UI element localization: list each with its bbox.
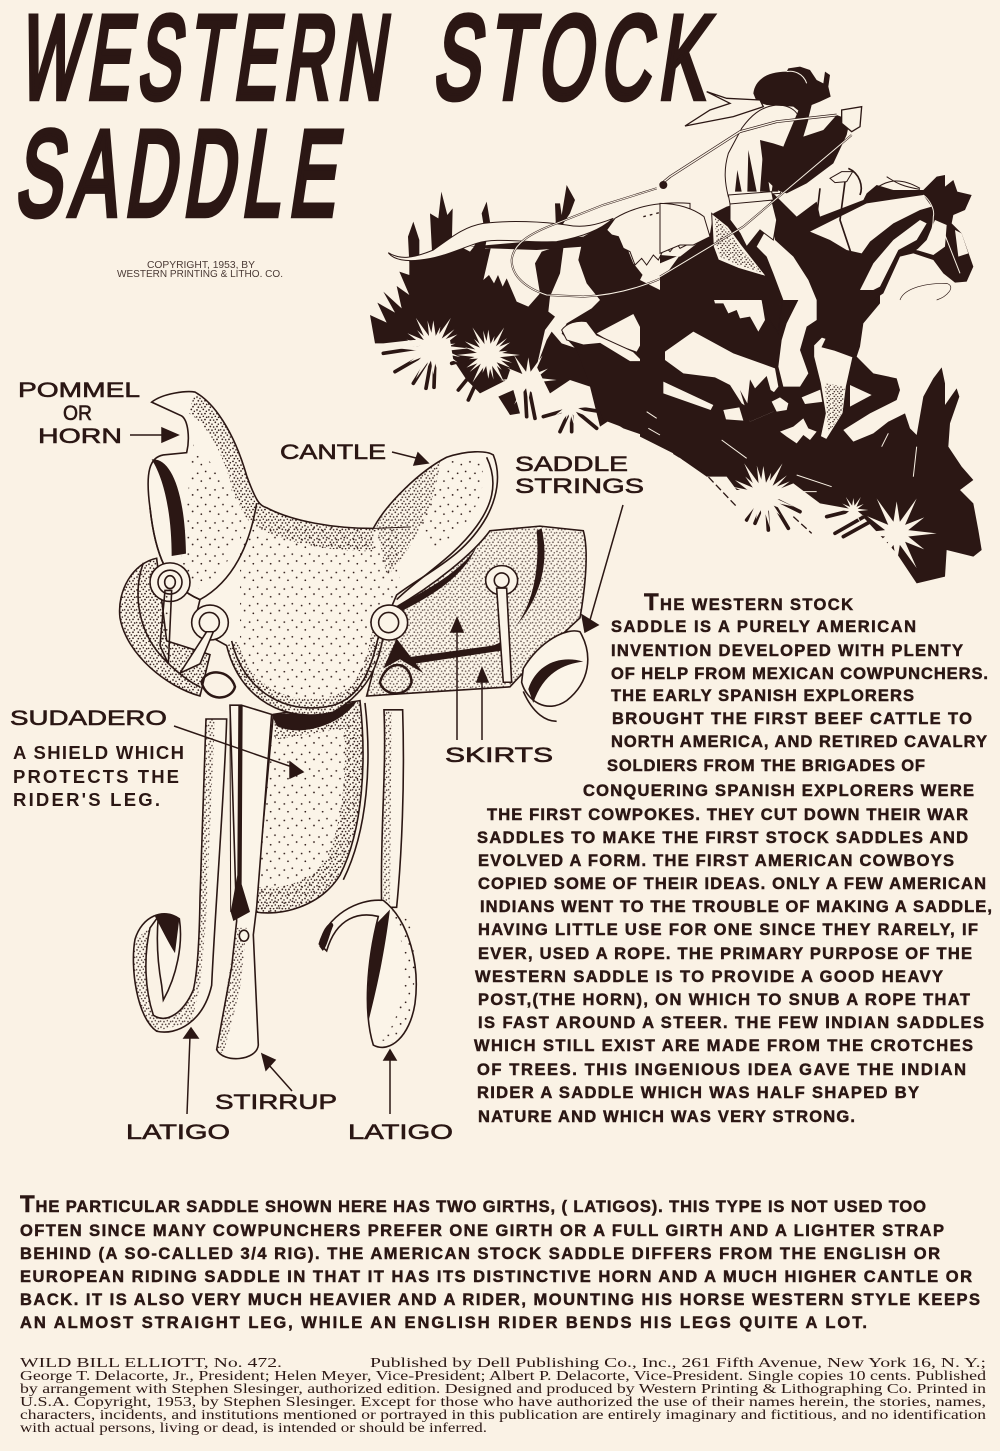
rear rosette and saddle strings bbox=[486, 566, 588, 721]
gap below rear leg bbox=[663, 382, 713, 410]
text block: history of the saddle: SADDLE IS A PURELY AMERICAN bbox=[611, 618, 916, 636]
reins bbox=[817, 168, 861, 260]
ground scratches bbox=[647, 412, 660, 435]
text block: history of the saddle: BROUGHT THE FIRST BEEF CATTLE TO bbox=[612, 710, 972, 728]
title bbox=[10, 0, 728, 241]
text block: history of the saddle: THE WESTERN STOCK bbox=[644, 589, 853, 616]
text block: this particular saddle: OFTEN SINCE MANY COWPUNCHERS PREFER ONE GIRTH OR A FULL GIRTH AND A LIGHTER STRAP bbox=[20, 1222, 944, 1240]
rope in hand bbox=[660, 115, 951, 300]
rider fist bbox=[842, 107, 862, 132]
arrow: to saddle strings bbox=[582, 505, 623, 632]
hindquarter dapples bbox=[643, 210, 688, 225]
text block: history of the saddle: INDIANS WENT TO THE TROUBLE OF MAKING A SADDLE, bbox=[480, 898, 992, 916]
grass tuft white bbox=[780, 418, 817, 443]
copyright note: COPYRIGHT, 1953, BY bbox=[147, 260, 255, 271]
left rosette and strings bbox=[150, 563, 190, 664]
hindquarter second highlight bbox=[640, 258, 690, 292]
shirt bbox=[725, 105, 800, 197]
label: pommel or horn bbox=[18, 379, 140, 448]
label: skirts: SKIRTS bbox=[445, 744, 553, 767]
rider thigh bbox=[730, 200, 777, 247]
sunburst spikes bbox=[383, 347, 612, 432]
arrow: to stirrup bbox=[262, 1054, 292, 1091]
arrow: to horn bbox=[130, 428, 178, 442]
arrow: to right latigo bbox=[384, 1050, 396, 1114]
text block: history of the saddle: OF TREES. THIS INGENIOUS IDEA GAVE THE INDIAN bbox=[477, 1061, 966, 1079]
rider and front of horse bbox=[659, 67, 973, 300]
shirt cuff band bbox=[728, 192, 773, 204]
label: pommel or horn: HORN bbox=[38, 425, 122, 448]
text block: this particular saddle: BACK. IT IS ALSO VERY MUCH HEAVIER AND A RIDER, MOUNTING HIS HORSE WESTERN STYLE KEEPS bbox=[20, 1291, 980, 1309]
text block: history of the saddle: OF HELP FROM MEXICAN COWPUNCHERS. bbox=[611, 665, 988, 683]
label: stirrup: STIRRUP bbox=[215, 1091, 337, 1114]
rear hoof bbox=[723, 407, 743, 421]
saddle fender bbox=[760, 290, 783, 333]
text block: history of the saddle: POST,(THE HORN), ON WHICH TO SNUB A ROPE THAT bbox=[478, 991, 970, 1009]
text block: history of the saddle: THE EARLY SPANISH EXPLORERS bbox=[611, 687, 914, 705]
lariat knot bbox=[659, 181, 667, 189]
jacket shadow bbox=[760, 107, 850, 193]
text block: history of the saddle: SADDLES TO MAKE THE FIRST STOCK SADDLES AND bbox=[477, 829, 968, 847]
flank highlight bbox=[660, 255, 680, 277]
arrow: to left latigo bbox=[184, 1028, 198, 1114]
label: pommel or horn: POMMEL bbox=[18, 379, 140, 402]
muzzle highlight bbox=[955, 230, 968, 257]
horn shadow bbox=[152, 459, 186, 556]
second rear leg bbox=[647, 355, 690, 380]
publisher fine print: by arrangement with Stephen Slesinger, authorized edition. Designed and produced by Western Printing & Lithographing Co. Printed in bbox=[20, 1382, 986, 1397]
label: pommel or horn: OR bbox=[63, 402, 92, 425]
text block: history of the saddle: RIDER A SADDLE WHICH WAS HALF SHAPED BY bbox=[477, 1084, 919, 1102]
rear of horse and left brush bbox=[370, 185, 690, 440]
horse rear silhouette bbox=[562, 218, 690, 440]
face highlight bbox=[917, 220, 947, 255]
right latigo bbox=[319, 710, 416, 1047]
text block: this particular saddle: BEHIND (A SO-CALLED 3/4 RIG). THE AMERICAN STOCK SADDLE DIFFERS FROM THE ENGLISH OR bbox=[20, 1245, 940, 1263]
copyright note bbox=[117, 260, 283, 280]
label: saddle strings: STRINGS bbox=[515, 475, 644, 498]
label: sudadero: A SHIELD WHICH bbox=[13, 742, 184, 763]
text block: history of the saddle: WESTERN SADDLE IS TO PROVIDE A GOOD HEAVY bbox=[475, 968, 943, 986]
lower horse, stirrup and right brush bbox=[640, 290, 982, 583]
text block: history of the saddle: EVOLVED A FORM. THE FIRST AMERICAN COWBOYS bbox=[478, 852, 954, 870]
grass tuft bbox=[740, 376, 780, 422]
text block: history of the saddle: CONQUERING SPANISH EXPLORERS WERE bbox=[583, 782, 974, 800]
ground under rear leg bbox=[537, 332, 690, 440]
text block: this particular saddle: AN ALMOST STRAIGHT LEG, WHILE AN ENGLISH RIDER BENDS HIS LEGS QUITE A LOT. bbox=[20, 1314, 867, 1332]
label: sudadero: SUDADERO bbox=[10, 707, 167, 730]
sudadero shield bbox=[253, 701, 368, 916]
left skirt bbox=[118, 557, 211, 697]
label: sudadero: RIDER'S LEG. bbox=[13, 789, 160, 810]
forelock mane strands bbox=[873, 177, 920, 190]
lariat loop bbox=[512, 188, 690, 297]
text block: history of the saddle: THE FIRST COWPOKES. THEY CUT DOWN THEIR WAR bbox=[487, 806, 968, 824]
sunbursts bbox=[725, 461, 937, 568]
text block: history of the saddle: HAVING LITTLE USE FOR ONE SINCE THEY RARELY, IF bbox=[478, 921, 978, 939]
publisher fine print: U.S.A. Copyright, 1953, by Stephen Slesinger. Except for those who have authorized the use of their names herein, the stories, names, bbox=[20, 1395, 986, 1410]
hat brim highlight bbox=[787, 71, 807, 83]
text block: history of the saddle: WHICH STILL EXIST ARE MADE FROM THE CROTCHES bbox=[474, 1037, 973, 1055]
text block: history of the saddle: NORTH AMERICA, AND RETIRED CAVALRY bbox=[611, 733, 987, 751]
grass highlight lines bbox=[647, 412, 917, 492]
text block: history of the saddle: EVER, USED A ROPE. THE PRIMARY PURPOSE OF THE bbox=[478, 945, 972, 963]
publisher fine print: Published by Dell Publishing Co., Inc., 261 Fifth Avenue, New York 16, N. Y.; bbox=[370, 1356, 986, 1371]
publisher fine print: WILD BILL ELLIOTT, No. 472. bbox=[20, 1356, 282, 1371]
right buckle ring bbox=[380, 665, 412, 693]
text block: history of the saddle: COPIED SOME OF THEIR IDEAS. ONLY A FEW AMERICAN bbox=[478, 875, 986, 893]
seat, horn and cantle bbox=[148, 392, 498, 715]
tail shadow bbox=[470, 237, 583, 250]
label: latigo left: LATIGO bbox=[126, 1121, 230, 1144]
right skirt bbox=[367, 522, 593, 701]
arrow: to sudadero bbox=[174, 726, 303, 778]
belly gap bbox=[597, 314, 645, 352]
brush patches bbox=[498, 390, 520, 415]
left latigo bbox=[133, 719, 227, 1032]
neckerchief bbox=[685, 92, 763, 126]
ground and horse belly bbox=[640, 290, 982, 583]
publisher fine print: characters, incidents, and institutions mentioned or portrayed in this publication are entirely imaginary and fictitious, and no identification bbox=[20, 1408, 986, 1423]
arrow: to cantle bbox=[392, 452, 428, 465]
center right rosette bbox=[371, 605, 423, 673]
boot heel bbox=[802, 388, 824, 404]
rein hand bbox=[830, 172, 853, 183]
shirt folds bbox=[735, 147, 778, 192]
boot toe bbox=[772, 397, 788, 412]
saddle callout labels bbox=[10, 379, 644, 1144]
text block: history of the saddle: NATURE AND WHICH WAS VERY STRONG. bbox=[478, 1108, 855, 1126]
sunburst spikes bbox=[747, 500, 873, 537]
center left rosette bbox=[180, 605, 228, 673]
publisher fine print bbox=[20, 1356, 986, 1436]
bridle and reins bbox=[917, 195, 960, 273]
hindquarter highlight front bbox=[660, 203, 710, 253]
label: sudadero: PROTECTS THE bbox=[13, 766, 179, 787]
hat bbox=[753, 67, 831, 118]
sunbursts bbox=[398, 316, 592, 427]
publisher fine print: George T. Delacorte, Jr., President; Helen Meyer, Vice-President; Albert P. Delacorte, Vice-President. Single copies 10 cents. Published bbox=[20, 1369, 986, 1384]
text block: this particular saddle bbox=[20, 1191, 980, 1332]
text block: history of the saddle: SOLDIERS FROM THE BRIGADES OF bbox=[607, 757, 925, 775]
title: SADDLE bbox=[10, 106, 358, 241]
left buckle ring bbox=[202, 672, 235, 697]
arrows: to skirts bbox=[451, 618, 488, 740]
neck highlight bbox=[810, 195, 932, 253]
text block: history of the saddle: INVENTION DEVELOPED WITH PLENTY bbox=[611, 642, 963, 660]
text block: history of the saddle bbox=[474, 589, 992, 1126]
brush and trees bbox=[370, 185, 575, 393]
text block: this particular saddle: THE PARTICULAR SADDLE SHOWN HERE HAS TWO GIRTHS, ( LATIGOS). THIS TYPE IS NOT USED TOO bbox=[20, 1191, 926, 1218]
gap below leg bbox=[663, 382, 690, 402]
saddle on horse bbox=[712, 213, 767, 277]
chap upper bbox=[757, 220, 817, 300]
label: sudadero bbox=[10, 707, 184, 810]
copyright note: WESTERN PRINTING & LITHO. CO. bbox=[117, 269, 283, 280]
broken ground edge bbox=[673, 453, 812, 533]
gap under belly bbox=[665, 332, 778, 422]
saddle diagram bbox=[113, 392, 593, 1059]
label: cantle: CANTLE bbox=[280, 441, 386, 464]
tail bbox=[388, 218, 613, 261]
boot and chap bottom bbox=[778, 290, 817, 387]
label: saddle strings: SADDLE bbox=[515, 453, 628, 476]
white triangle behind leg bbox=[850, 385, 872, 407]
text block: this particular saddle: EUROPEAN RIDING SADDLE IN THAT IT HAS ITS DISTINCTIVE HORN AND A MUCH HIGHER CANTLE OR bbox=[20, 1268, 972, 1286]
hindquarter highlight bbox=[607, 203, 690, 265]
lower neck highlight bbox=[860, 220, 927, 290]
label: saddle strings bbox=[515, 453, 644, 498]
rear hock bbox=[562, 321, 643, 362]
horse front silhouette bbox=[660, 175, 973, 300]
illustration: cowboy roping on horseback bbox=[370, 67, 982, 583]
text block: history of the saddle: IS FAST AROUND A STEER. THE FEW INDIAN SADDLES bbox=[478, 1014, 984, 1032]
publisher fine print: with actual persons, living or dead, is intended or should be inferred. bbox=[20, 1421, 487, 1436]
stirrup bbox=[217, 705, 272, 1059]
belly fringe white bbox=[712, 290, 765, 332]
tapadero stirrup bbox=[813, 337, 853, 440]
label: latigo right: LATIGO bbox=[348, 1121, 453, 1144]
